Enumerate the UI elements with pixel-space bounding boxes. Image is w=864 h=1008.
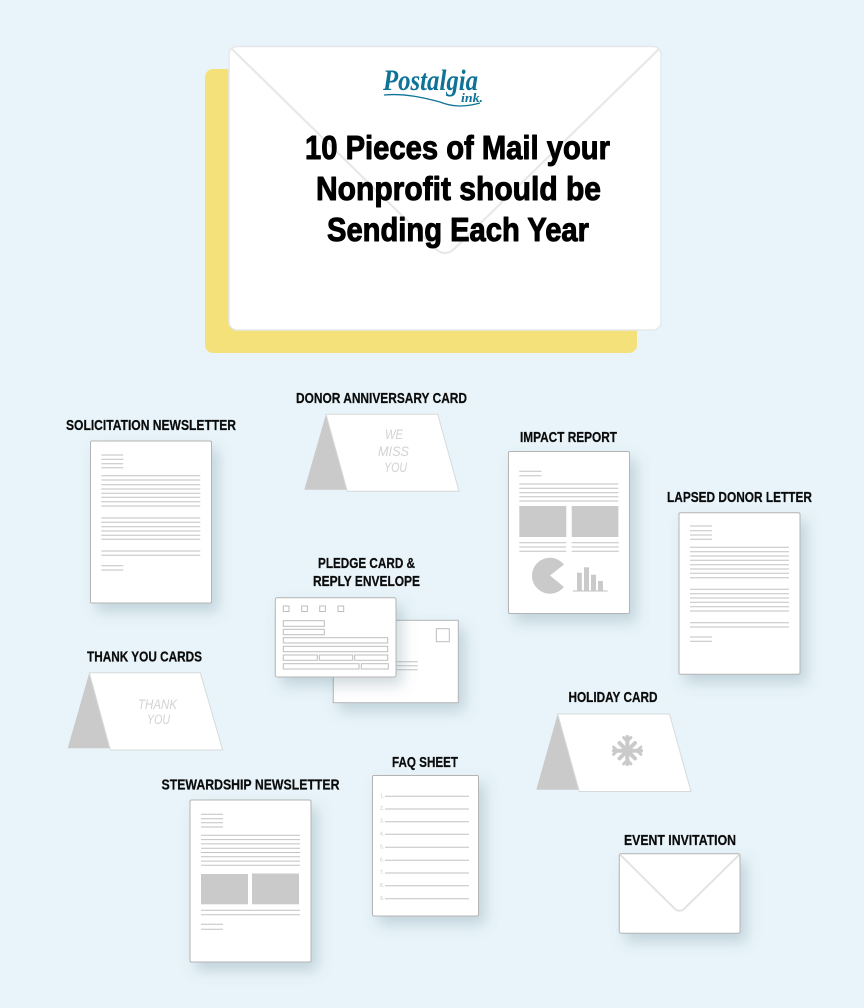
numbered page: 4. bbox=[380, 832, 384, 838]
report page bbox=[508, 452, 630, 614]
numbered page bbox=[372, 776, 478, 916]
letter page bbox=[90, 441, 212, 603]
numbered page: 1. bbox=[380, 794, 384, 800]
folded card bbox=[304, 414, 459, 491]
heading: THANK YOU CARDS bbox=[87, 648, 202, 666]
heading: HOLIDAY CARD bbox=[568, 689, 658, 706]
numbered page: 9. bbox=[380, 896, 384, 902]
heading: EVENT INVITATION bbox=[624, 832, 736, 849]
heading: IMPACT REPORT bbox=[520, 429, 617, 446]
folded card bbox=[68, 673, 223, 750]
photo blocks bbox=[201, 874, 299, 904]
logo: Postalgia ink: Postalgia bbox=[382, 64, 478, 97]
icon: snowflake bbox=[614, 737, 641, 764]
item: holiday card bbox=[536, 689, 691, 792]
numbered page: 6. bbox=[380, 858, 384, 864]
folded card: YOU bbox=[147, 711, 171, 727]
numbered page: 3. bbox=[380, 819, 384, 825]
logo: Postalgia ink: ink. bbox=[461, 90, 483, 105]
title: Sending Each Year bbox=[327, 211, 589, 248]
heading: LAPSED DONOR LETTER bbox=[667, 489, 812, 506]
numbered page: 2. bbox=[380, 806, 384, 812]
item: lapsed donor letter bbox=[667, 489, 812, 674]
letter page bbox=[679, 513, 800, 674]
photo blocks bbox=[519, 506, 618, 537]
white envelope bbox=[229, 46, 661, 330]
heading: STEWARDSHIP NEWSLETTER bbox=[162, 776, 340, 794]
folded card: WE bbox=[385, 426, 404, 442]
item: event invitation bbox=[619, 832, 740, 933]
heading bbox=[313, 555, 420, 590]
title: 10 Pieces of Mail your bbox=[305, 129, 610, 166]
folded card bbox=[536, 714, 691, 792]
title bbox=[305, 129, 610, 248]
heading: PLEDGE CARD & bbox=[318, 555, 415, 572]
logo: Postalgia ink bbox=[382, 64, 483, 106]
numbered page: 8. bbox=[380, 883, 384, 889]
folded card: MISS bbox=[378, 443, 410, 459]
folded card: YOU bbox=[384, 459, 408, 475]
newsletter page bbox=[190, 800, 311, 962]
heading: REPLY ENVELOPE bbox=[313, 573, 420, 590]
item: FAQ sheet bbox=[372, 754, 478, 916]
heading: FAQ SHEET bbox=[392, 754, 458, 771]
title: Nonprofit should be bbox=[316, 170, 601, 207]
item: donor anniversary card bbox=[296, 390, 467, 491]
numbered page: 5. bbox=[380, 844, 384, 850]
folded card: THANK bbox=[138, 696, 178, 712]
heading: DONOR ANNIVERSARY CARD bbox=[296, 390, 467, 407]
envelope bbox=[619, 854, 740, 933]
panel: header envelope bbox=[205, 46, 661, 353]
item: thank you cards bbox=[68, 648, 223, 750]
reply envelope bbox=[333, 620, 458, 703]
item: pledge card and reply envelope bbox=[275, 555, 458, 703]
yellow backing card bbox=[205, 69, 637, 353]
numbered page: 7. bbox=[380, 870, 384, 876]
heading: SOLICITATION NEWSLETTER bbox=[66, 417, 236, 434]
item: stewardship newsletter bbox=[162, 776, 340, 962]
pledge card bbox=[275, 598, 396, 677]
bar chart bbox=[577, 567, 603, 591]
item: solicitation newsletter bbox=[66, 417, 236, 603]
pie chart bbox=[532, 558, 564, 594]
item: impact report bbox=[508, 429, 630, 614]
